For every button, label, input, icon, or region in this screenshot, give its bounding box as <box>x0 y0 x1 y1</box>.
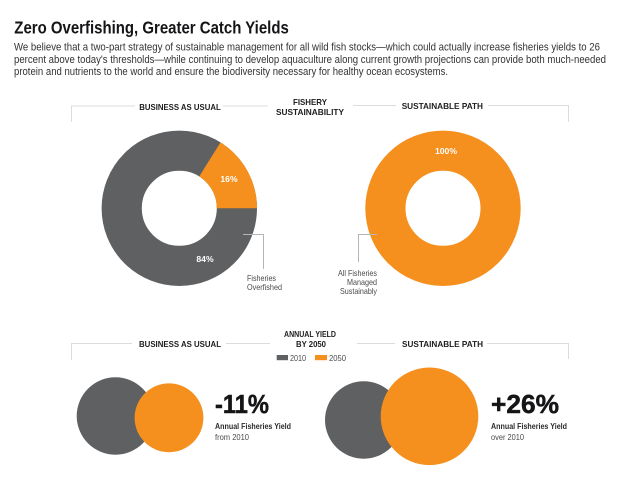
callout: fisheries overfished: Fisheries <box>247 274 276 283</box>
donut chart: sustainable path <box>385 146 501 266</box>
stat: +26%: +26% <box>491 389 559 419</box>
stat: +26% <box>491 389 567 442</box>
donut chart: business as usual <box>122 142 257 266</box>
stat: +26%: Annual Fisheries Yield <box>491 421 567 431</box>
heading: fishery sustainability: FISHERY <box>293 97 327 107</box>
label: 100%: 100% <box>435 146 457 156</box>
intro text: protein and nutrients to the world and ensure the biodiversity necessary for healthy ocean ecosystems. <box>14 66 448 78</box>
heading: fishery sustainability <box>276 97 344 117</box>
legend: 2050 <box>329 354 346 363</box>
heading: business as usual (yield): BUSINESS AS USUAL <box>139 339 221 349</box>
callout: all fisheries managed sustainably: Managed <box>347 278 377 287</box>
stat: -11%: from 2010 <box>215 433 249 442</box>
callout: all fisheries managed sustainably: All Fisheries <box>338 269 377 278</box>
stat: +26%: over 2010 <box>491 433 524 442</box>
callout: all fisheries managed sustainably: Sustainably <box>340 287 378 296</box>
label: 16%: 16% <box>220 174 238 184</box>
heading: sustainable path (sustainability): SUSTAINABLE PATH <box>402 101 483 111</box>
title: Zero Overfishing, Greater Catch Yields <box>14 18 289 38</box>
label: 84%: 84% <box>196 254 214 264</box>
bubbles: business as usual <box>77 377 203 455</box>
heading: fishery sustainability: SUSTAINABILITY <box>276 107 344 117</box>
intro text <box>14 42 606 78</box>
legend: 2010 <box>290 354 306 363</box>
callout: all fisheries managed sustainably <box>338 234 378 296</box>
stat: -11%: Annual Fisheries Yield <box>215 421 291 431</box>
bubbles: sustainable path <box>325 368 478 465</box>
heading: business as usual (sustainability): BUSINESS AS USUAL <box>139 102 221 112</box>
heading: sustainable path (yield): SUSTAINABLE PATH <box>402 339 483 349</box>
stat: -11% <box>215 389 291 442</box>
heading: annual yield by 2050: ANNUAL YIELD <box>284 329 336 339</box>
callout: fisheries overfished <box>243 234 282 292</box>
legend <box>277 354 346 363</box>
heading: annual yield by 2050: BY 2050 <box>296 339 326 349</box>
heading: annual yield by 2050 <box>284 329 336 349</box>
callout: fisheries overfished: Overfished <box>247 283 282 292</box>
stat: -11%: -11% <box>215 389 269 419</box>
